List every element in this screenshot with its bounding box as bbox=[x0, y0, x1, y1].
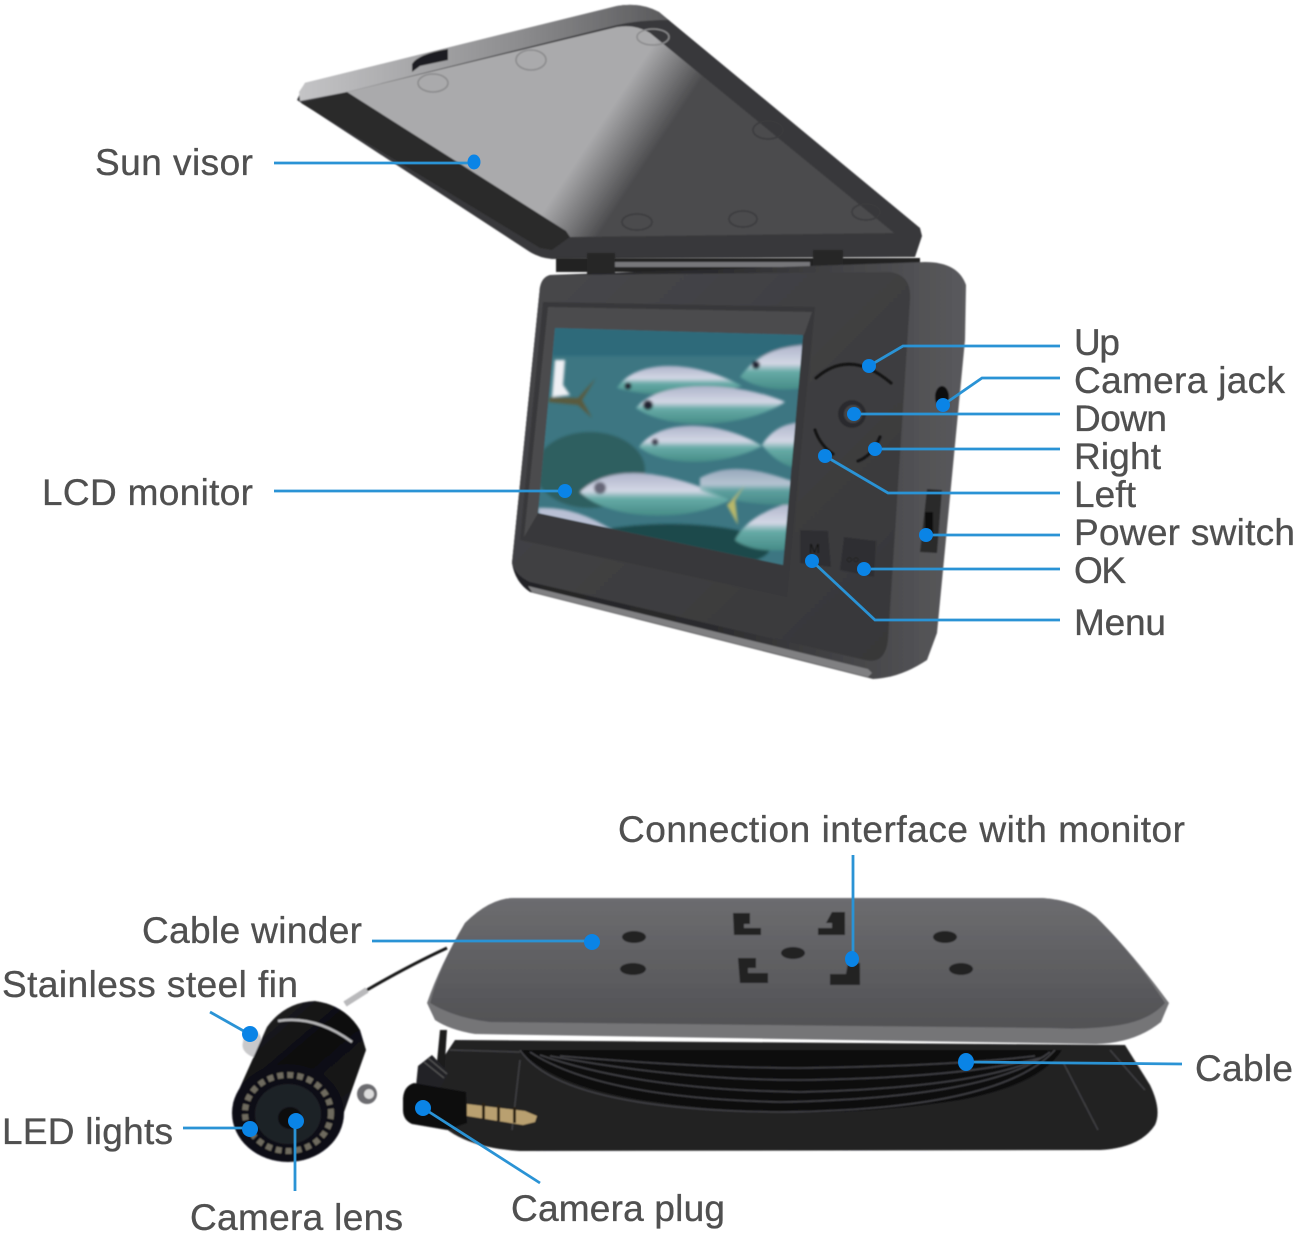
winder tray bbox=[430, 1040, 1158, 1151]
callout: Down bbox=[847, 398, 1167, 439]
callout: Sun visor: Sun visor bbox=[95, 142, 253, 183]
callout: Connection interface with monitor: Connection interface with monitor bbox=[618, 809, 1185, 850]
callout: Power switch: Power switch bbox=[1074, 512, 1295, 553]
screen image bbox=[530, 320, 810, 572]
cable coil bbox=[520, 1050, 1055, 1112]
callout: Menu bbox=[805, 554, 1166, 643]
callout: Right bbox=[868, 436, 1162, 477]
menu button: M bbox=[809, 541, 820, 556]
cable winder bbox=[403, 898, 1169, 1151]
callout: Left: Left bbox=[1074, 474, 1137, 515]
camera body bbox=[233, 1001, 366, 1115]
callout: Cable: Cable bbox=[1195, 1048, 1293, 1089]
callout: Cable winder bbox=[142, 910, 600, 951]
callout: LCD monitor: LCD monitor bbox=[42, 472, 253, 513]
callout: Right: Right bbox=[1074, 436, 1162, 477]
callout: Cable winder: Cable winder bbox=[142, 910, 362, 951]
callout: Stainless steel fin bbox=[2, 964, 298, 1042]
callout: Connection interface with monitor bbox=[618, 809, 1185, 967]
camera jack socket bbox=[935, 386, 949, 408]
rear fin bbox=[357, 1084, 377, 1104]
menu button bbox=[800, 530, 831, 567]
callout: Camera plug bbox=[415, 1100, 725, 1229]
winder top plate bbox=[427, 898, 1169, 1044]
camera plug bbox=[403, 1030, 537, 1130]
callout: LCD monitor bbox=[42, 472, 572, 513]
callout: LED lights bbox=[2, 1111, 258, 1152]
power switch bbox=[920, 489, 942, 553]
sun visor bbox=[297, 5, 922, 259]
callout: LED lights: LED lights bbox=[2, 1111, 173, 1152]
monitor body bbox=[512, 262, 966, 679]
callout: OK bbox=[857, 550, 1126, 591]
control ring bbox=[815, 364, 891, 461]
ok button: ○○ bbox=[846, 554, 859, 566]
monitor hinge bar bbox=[556, 250, 920, 275]
callout: Power switch bbox=[919, 512, 1295, 553]
callout: OK: OK bbox=[1074, 550, 1126, 591]
callout: Camera lens bbox=[190, 1113, 403, 1235]
camera front with LED ring bbox=[232, 1064, 344, 1162]
camera cable bbox=[345, 948, 447, 1004]
callout: Down: Down bbox=[1074, 398, 1167, 439]
callout: Cable bbox=[958, 1048, 1293, 1089]
callout: Sun visor bbox=[95, 142, 480, 183]
callout: Camera jack: Camera jack bbox=[1074, 360, 1286, 401]
stainless steel fin bbox=[242, 1028, 262, 1058]
underwater camera bbox=[232, 948, 447, 1162]
callout: Camera jack bbox=[936, 360, 1286, 412]
callout: Stainless steel fin: Stainless steel fin bbox=[2, 964, 298, 1005]
callout: Up bbox=[862, 322, 1120, 373]
center button bbox=[838, 400, 866, 428]
callout: Left bbox=[818, 449, 1137, 515]
monitor bbox=[512, 250, 966, 679]
ok button bbox=[840, 537, 876, 577]
callout: Camera plug: Camera plug bbox=[511, 1188, 725, 1229]
callout: Up: Up bbox=[1074, 322, 1120, 363]
callout: Menu: Menu bbox=[1074, 602, 1166, 643]
